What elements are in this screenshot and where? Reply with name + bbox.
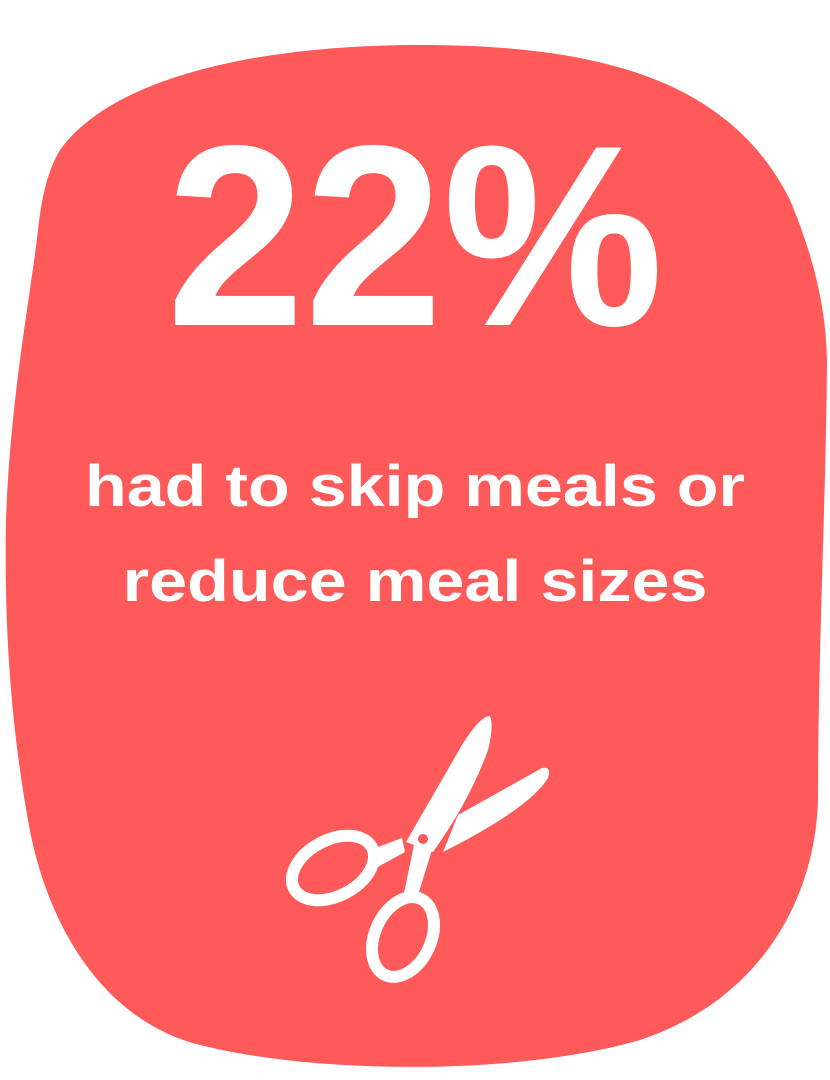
title: 22%: 22%: [166, 91, 664, 380]
text block: description: [85, 454, 745, 614]
text block: description: reduce meal sizes: [122, 549, 708, 614]
text block: description: had to skip meals or: [85, 454, 745, 519]
icon: scissors: [281, 716, 549, 987]
